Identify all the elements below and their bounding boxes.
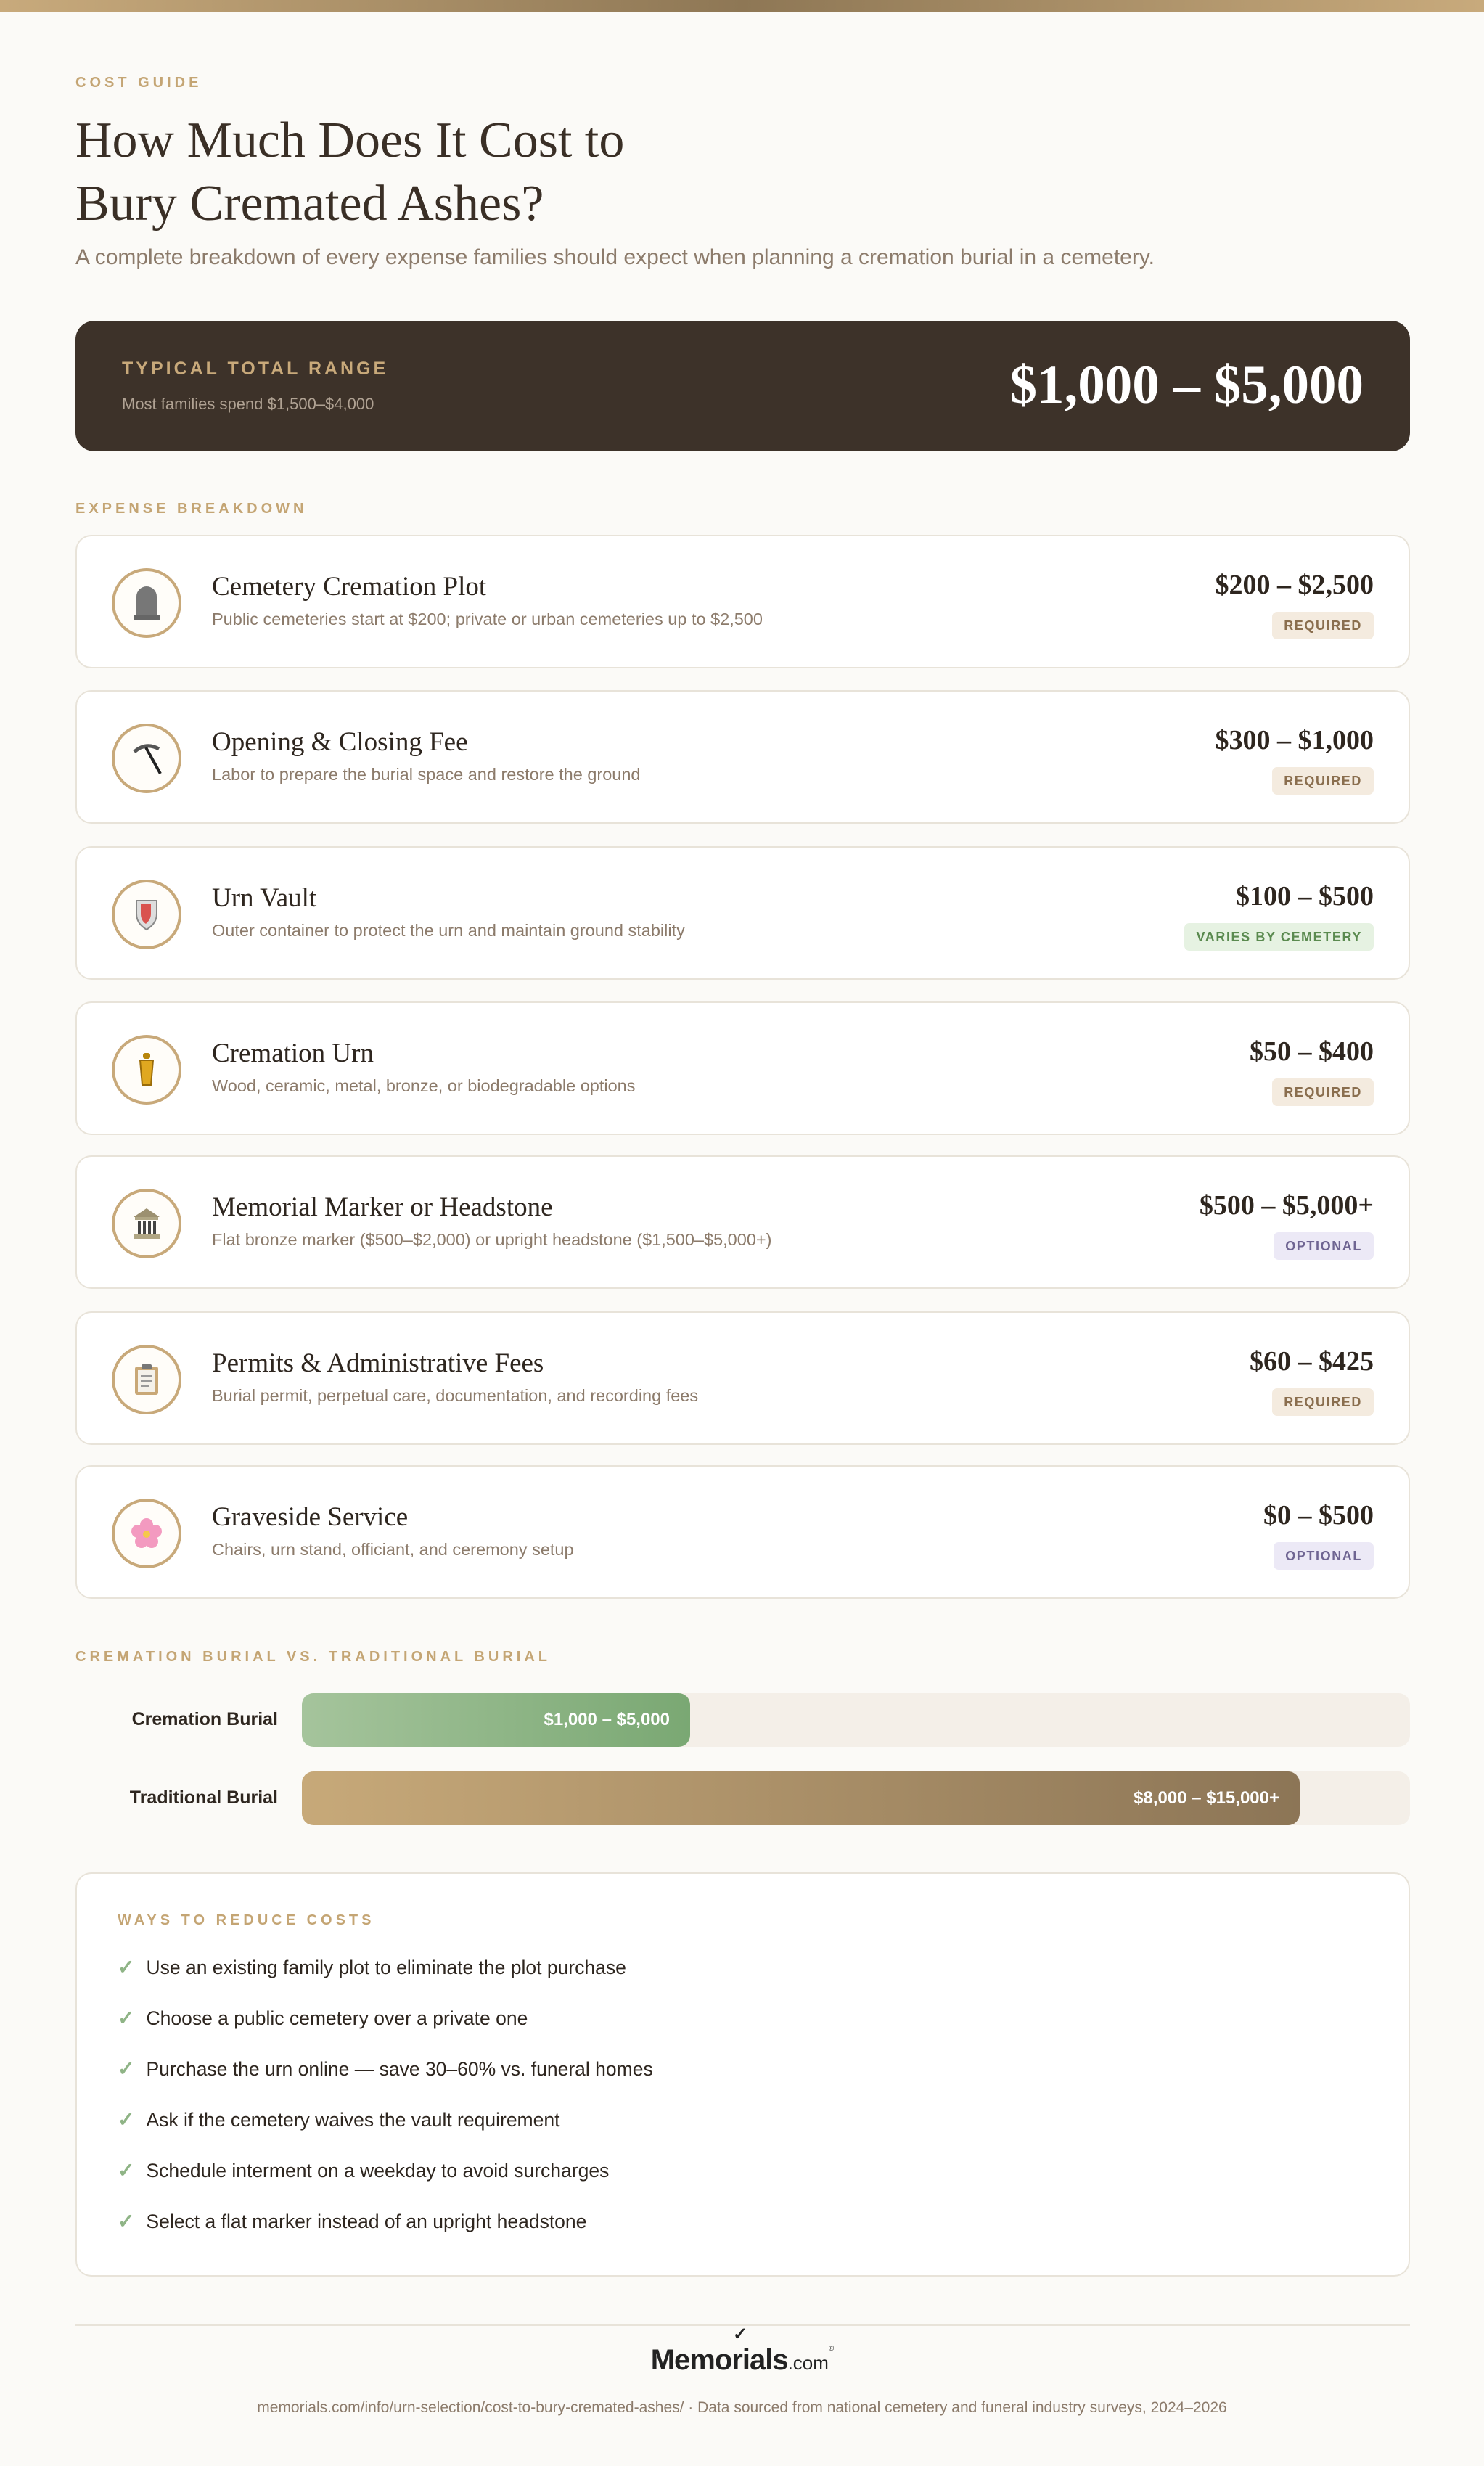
tips list: ✓ Use an existing family plot to eliminate the plot purchase: [118, 1956, 626, 1978]
price: $300 – $1,000: [1215, 725, 1374, 755]
comparison bar chart: [130, 1693, 1410, 1825]
total range note: Most families spend $1,500–$4,000: [122, 395, 374, 413]
title: Graveside Service: [212, 1502, 408, 1532]
eyebrow: comparison: CREMATION BURIAL VS. TRADITIONAL BURIAL: [75, 1649, 551, 1665]
badge: REQUIRED: [1284, 618, 1362, 633]
card: marker: [75, 1155, 1410, 1289]
title: Cremation Urn: [212, 1039, 374, 1068]
badge: REQUIRED: [1284, 1395, 1362, 1409]
panel: ways to reduce costs: [75, 1872, 1410, 2277]
badge: [1272, 767, 1374, 795]
subtitle: A complete breakdown of every expense families should expect when planning a cremation burial in a cemetery.: [75, 245, 1155, 269]
tips list: ✓ Purchase the urn online — save 30–60% vs. funeral homes: [118, 2057, 653, 2080]
title: Permits & Administrative Fees: [212, 1348, 544, 1378]
badge: REQUIRED: [1284, 1085, 1362, 1099]
logo: Memorials.com®: [651, 2344, 834, 2376]
icon: urn: [112, 1035, 181, 1105]
bar: traditional: [302, 1771, 1410, 1825]
title: Urn Vault: [212, 883, 316, 913]
price: $500 – $5,000+: [1200, 1190, 1374, 1221]
icon: clipboard: [112, 1345, 181, 1414]
total range panel: [75, 321, 1410, 451]
desc: Wood, ceramic, metal, bronze, or biodegradable options: [212, 1076, 635, 1095]
badge: [1272, 1388, 1374, 1416]
desc: Flat bronze marker ($500–$2,000) or upright headstone ($1,500–$5,000+): [212, 1230, 771, 1249]
card: permits: [75, 1311, 1410, 1445]
price: $0 – $500: [1263, 1500, 1374, 1531]
footer source: memorials.com/info/urn-selection/cost-to-bury-cremated-ashes/ · Data sourced from national cemetery and funeral industry surveys, 2024–2026: [257, 2399, 1227, 2416]
total range value: $1,000 – $5,000: [1010, 355, 1364, 415]
desc: Labor to prepare the burial space and restore the ground: [212, 765, 641, 784]
desc: Public cemeteries start at $200; private or urban cemeteries up to $2,500: [212, 610, 763, 628]
bar: cremation: $1,000 – $5,000: [544, 1710, 670, 1729]
top gradient bar: [0, 0, 1484, 12]
icon: monument: [112, 1189, 181, 1258]
title: Memorial Marker or Headstone: [212, 1192, 553, 1222]
logo: [651, 2324, 835, 2376]
text: ✓: [733, 2324, 747, 2344]
bar: cremation: [302, 1693, 1410, 1747]
tips list: ✓ Schedule interment on a weekday to avoid surcharges: [118, 2159, 609, 2182]
card: urn: [75, 1001, 1410, 1135]
price: $100 – $500: [1236, 881, 1374, 912]
icon: flower: [112, 1499, 181, 1568]
badge: OPTIONAL: [1285, 1549, 1362, 1563]
label: cremation: Cremation Burial: [132, 1709, 278, 1729]
tips heading: WAYS TO REDUCE COSTS: [118, 1912, 374, 1928]
title: How Much Does It Cost to: [75, 112, 624, 168]
badge: VARIES BY CEMETERY: [1196, 930, 1362, 944]
price: $50 – $400: [1250, 1036, 1374, 1067]
price: $60 – $425: [1250, 1346, 1374, 1377]
badge: [1272, 1078, 1374, 1106]
tips list: ✓ Ask if the cemetery waives the vault requirement: [118, 2108, 559, 2131]
desc: Outer container to protect the urn and maintain ground stability: [212, 921, 685, 940]
badge: OPTIONAL: [1285, 1239, 1362, 1253]
eyebrow: cost guide: COST GUIDE: [75, 75, 202, 91]
badge: [1184, 923, 1374, 951]
price: $200 – $2,500: [1215, 570, 1374, 600]
eyebrow: expense breakdown: EXPENSE BREAKDOWN: [75, 501, 307, 517]
card: urn vault: [75, 846, 1410, 980]
tips list: ✓ Select a flat marker instead of an upright headstone: [118, 2210, 586, 2232]
desc: Chairs, urn stand, officiant, and ceremony setup: [212, 1540, 574, 1559]
title: Opening & Closing Fee: [212, 727, 468, 757]
card: opening closing: [75, 690, 1410, 824]
badge: [1274, 1232, 1374, 1260]
total range label: TYPICAL TOTAL RANGE: [122, 359, 388, 379]
card: graveside: [75, 1465, 1410, 1599]
title: Bury Cremated Ashes?: [75, 176, 544, 232]
icon: pick: [112, 724, 181, 793]
title: Cemetery Cremation Plot: [212, 572, 486, 602]
badge: [1272, 612, 1374, 639]
label: traditional: Traditional Burial: [130, 1787, 278, 1808]
title: [75, 112, 624, 232]
card: plot: [75, 535, 1410, 668]
bar: traditional: $8,000 – $15,000+: [1134, 1788, 1279, 1808]
desc: Burial permit, perpetual care, documentation, and recording fees: [212, 1386, 698, 1405]
icon: shield: [112, 880, 181, 949]
tips list: ✓ Choose a public cemetery over a private one: [118, 2007, 528, 2029]
badge: REQUIRED: [1284, 774, 1362, 788]
badge: [1274, 1542, 1374, 1570]
icon: headstone: [112, 568, 181, 638]
